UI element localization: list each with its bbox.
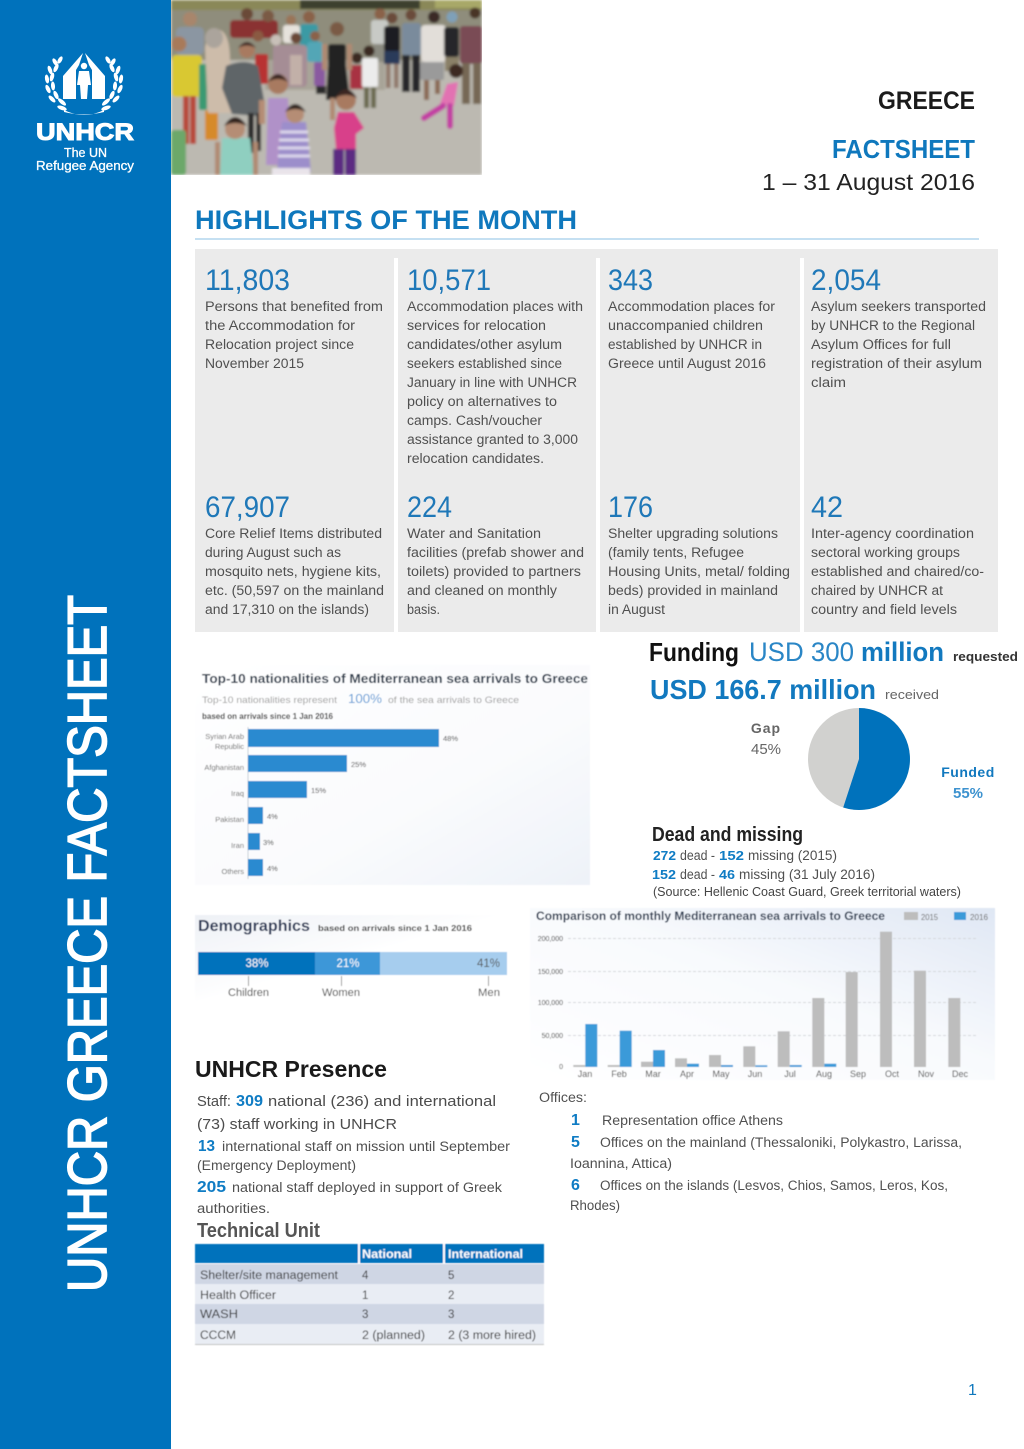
headscarf woman [205, 30, 234, 113]
horizontal bar chart: Republic [215, 742, 244, 751]
horizontal bar chart: 4% [267, 812, 278, 821]
pink shirt child [334, 112, 364, 150]
header: factsheet: FACTSHEET [832, 134, 975, 164]
figure: 176: Housing Units, metal/ folding [608, 564, 790, 579]
figure: 2,054: registration of their asylum [811, 356, 982, 371]
month labels: Dec [952, 1069, 968, 1079]
funding received: received [885, 687, 939, 702]
figure: 10,571: January in line with UNHCR [407, 375, 577, 390]
panel: demographics [195, 915, 510, 1005]
table: technical unit staff: National [362, 1249, 412, 1261]
header: country: GREECE [878, 87, 975, 115]
table: technical unit staff: 4 [362, 1270, 369, 1282]
vertical title: UNHCR GREECE FACTSHEET [56, 595, 118, 1292]
figure: 11,803: 11,803 [205, 264, 290, 297]
offices text: Ioannina, Attica) [570, 1156, 672, 1171]
heading: technical unit: Technical Unit [197, 1220, 320, 1242]
month labels: Apr [680, 1069, 694, 1079]
figure: 224: facilities (prefab shower and [407, 545, 584, 560]
funding heading: requested [953, 649, 1018, 664]
month labels: Oct [885, 1069, 899, 1079]
background children [255, 54, 268, 84]
figure: 67,907: Core Relief Items distributed [205, 526, 382, 541]
horizontal bar chart: 25% [351, 760, 366, 769]
staff text: 309 [236, 1093, 263, 1110]
running girl [440, 82, 458, 106]
table: technical unit staff: 1 [362, 1290, 368, 1302]
offices text: Offices on the mainland (Thessaloniki, Polykastro, Larissa, [600, 1135, 962, 1150]
gridlines and axis labels: 0 [559, 1064, 563, 1071]
staff text: (Emergency Deployment) [197, 1158, 356, 1173]
heading: UNHCR presence: UNHCR Presence [195, 1056, 387, 1082]
figure: 10,571 [407, 264, 583, 466]
horizontal bar chart: Iraq [231, 789, 244, 798]
staff text [197, 1093, 511, 1216]
table: technical unit staff: International [448, 1249, 523, 1261]
table: technical unit staff: 2 (3 more hired) [448, 1330, 536, 1342]
figure: 343: established by UNHCR in [608, 337, 762, 352]
funding pie chart [808, 708, 910, 810]
bar labels: Men [478, 987, 500, 999]
panel: monthly arrivals comparison chart [530, 908, 995, 1080]
figure: 224: Water and Sanitation [407, 526, 541, 541]
panel: key figures [195, 249, 998, 632]
figure: 11,803: November 2015 [205, 356, 304, 371]
figure: 10,571: camps. Cash/voucher [407, 413, 543, 428]
figure: 10,571: seekers established since [407, 356, 562, 371]
staff text: international staff on mission until September [222, 1139, 511, 1154]
figure: 343 [608, 264, 776, 371]
gridlines and axis labels: 50,000 [542, 1033, 563, 1040]
dead and missing: 46 [719, 868, 735, 882]
figure: 2,054: by UNHCR to the Regional [811, 318, 975, 333]
offices text: 5 [571, 1134, 580, 1151]
figure: 11,803: Persons that benefited from [205, 299, 383, 314]
chart title: Comparison of monthly Mediterranean sea arrivals to Greece [536, 911, 885, 923]
chart legend [904, 912, 989, 922]
figure: 343: 343 [608, 264, 653, 297]
figure: 67,907: 67,907 [205, 491, 290, 524]
dead and missing: 152 [719, 849, 744, 863]
figure: 2,054: Asylum seekers transported [811, 299, 986, 314]
table: technical unit staff: 3 [362, 1309, 368, 1321]
table: technical unit staff: 5 [448, 1270, 454, 1282]
icon: wreath [44, 56, 124, 115]
figure: 42: sectoral working groups [811, 545, 960, 560]
figure: 224: basis. [407, 602, 440, 617]
figure: 67,907: mosquito nets, hygiene kits, [205, 564, 381, 579]
offices text: 1 [571, 1112, 580, 1129]
horizontal bar chart [204, 727, 458, 879]
stacked bar: 38% [245, 958, 269, 970]
figure: 176: 176 [608, 491, 653, 524]
offices text [539, 1090, 962, 1213]
funding heading: Funding [649, 637, 739, 667]
dead and missing: Dead and missing [652, 824, 803, 846]
table: technical unit staff: Health Officer [200, 1290, 276, 1302]
offices text: Rhodes) [570, 1198, 620, 1213]
figure: 224 [407, 491, 584, 617]
header: date: 1 – 31 August 2016 [762, 169, 975, 195]
staff text: national staff deployed in support of Greek [232, 1180, 502, 1195]
funding heading: USD 300 [749, 637, 854, 667]
horizontal bar chart: 3% [263, 838, 274, 847]
figure: 2,054: Asylum Offices for full [811, 337, 951, 352]
sidebar [0, 0, 171, 1449]
horizontal bar chart: 15% [311, 786, 326, 795]
pie label: gap [751, 720, 781, 758]
figure: 176: Shelter upgrading solutions [608, 526, 778, 541]
figure: 343: Accommodation places for [608, 299, 776, 314]
pie label: funded: Funded [941, 764, 995, 780]
striped child [277, 122, 311, 172]
figure: 67,907 [205, 491, 384, 617]
figure: 42: country and field levels [811, 602, 957, 617]
left bottom green [171, 130, 186, 175]
dead and missing: missing (31 July 2016) [739, 867, 875, 882]
figure: 11,803: the Accommodation for [205, 318, 356, 333]
figure: 2,054: 2,054 [811, 264, 881, 297]
figure: 42 [811, 491, 984, 617]
stacked bar: 41% [477, 958, 500, 970]
figure: 224: and cleaned on monthly [407, 583, 557, 598]
icon: sheltering hands and family [63, 53, 105, 99]
yellow shirt child [172, 55, 202, 97]
logo tagline line 2: Refugee Agency [36, 159, 135, 173]
horizontal bar chart: Afghanistan [204, 763, 244, 772]
bars: 2015 [573, 932, 960, 1067]
horizontal bar chart: Pakistan [215, 815, 244, 824]
figure: 42: chaired by UNHCR at [811, 583, 943, 598]
black dress woman [328, 44, 346, 68]
offices text: Offices: [539, 1090, 587, 1105]
dead and missing: dead - [680, 848, 715, 863]
figure: 10,571: Accommodation places with [407, 299, 583, 314]
figure: 10,571: relocation candidates. [407, 451, 544, 466]
heading: highlights of the month: HIGHLIGHTS OF THE MONTH [195, 205, 577, 235]
figure: 224: toilets) provided to partners [407, 564, 581, 579]
chart legend: 2016 [970, 913, 989, 922]
figure: 176: in August [608, 602, 665, 617]
table: technical unit staff [195, 1244, 544, 1345]
logo tagline line 1: The UN [64, 146, 107, 160]
staff text: authorities. [197, 1201, 270, 1216]
panel: top-10 nationalities chart [195, 665, 590, 885]
dead and missing: 272 [653, 849, 676, 863]
demographics heading: Demographics [198, 918, 310, 935]
logo wordmark: UNHCR [36, 119, 134, 146]
chart title: Top-10 nationalities of Mediterranean sea arrivals to Greece [202, 672, 588, 686]
month labels: Aug [816, 1069, 832, 1079]
figure: 42: Inter-agency coordination [811, 526, 974, 541]
dead and missing [652, 824, 961, 899]
table: technical unit staff: 2 [448, 1290, 454, 1302]
pie label: gap: Gap [751, 720, 781, 736]
chart subtitle: 100% [348, 691, 382, 706]
demographics note: based on arrivals since 1 Jan 2016 [318, 923, 472, 933]
figure: 176 [608, 491, 790, 617]
gridlines and axis labels: 200,000 [538, 936, 563, 943]
month labels: Mar [645, 1069, 661, 1079]
back adults [371, 20, 388, 44]
stacked bar [198, 952, 507, 975]
figure: 224: 224 [407, 491, 452, 524]
figure: 10,571: candidates/other asylum [407, 337, 562, 352]
table: technical unit staff: 3 [448, 1309, 454, 1321]
funding heading: million [861, 637, 944, 667]
figure: 343: unaccompanied children [608, 318, 763, 333]
pie label: funded [941, 764, 995, 802]
grey dress girl [222, 62, 264, 116]
mint dress child [220, 138, 254, 175]
chart subtitle: of the sea arrivals to Greece [388, 695, 519, 706]
table: technical unit staff: Shelter/site management [200, 1270, 339, 1282]
purple dress girl [266, 98, 290, 165]
horizontal bar chart: Syrian Arab [205, 732, 244, 741]
month labels: Sep [850, 1069, 866, 1079]
offices text: Representation office Athens [602, 1113, 783, 1128]
bar labels: Children [228, 987, 269, 999]
bar labels [228, 976, 500, 999]
staff text: 205 [197, 1179, 226, 1196]
pie label: funded: 55% [953, 785, 983, 802]
table: technical unit staff: WASH [200, 1309, 238, 1321]
month labels: May [712, 1069, 730, 1079]
horizontal bar chart: 4% [267, 864, 278, 873]
chart subtitle: Top-10 nationalities represent [202, 695, 337, 706]
table: technical unit staff: CCCM [200, 1330, 236, 1342]
figure: 67,907: and 17,310 on the islands) [205, 602, 369, 617]
table: technical unit staff: 2 (planned) [362, 1330, 425, 1342]
page number: 1 [968, 1382, 977, 1399]
figure: 343: Greece until August 2016 [608, 356, 766, 371]
chart note: based on arrivals since 1 Jan 2016 [202, 712, 334, 721]
month labels: Jun [748, 1069, 762, 1079]
staff text: national (236) and international [268, 1094, 496, 1110]
dead and missing: (Source: Hellenic Coast Guard, Greek territorial waters) [653, 885, 961, 899]
staff text: Staff: [197, 1094, 231, 1110]
figure: 10,571: policy on alternatives to [407, 394, 557, 409]
figure: 67,907: during August such as [205, 545, 341, 560]
month labels [578, 1069, 968, 1079]
horizontal bar chart: 48% [443, 734, 458, 743]
gridlines and axis labels: 150,000 [538, 969, 563, 976]
figure: 176: beds) provided in mainland [608, 583, 778, 598]
funding received: USD 166.7 million [650, 674, 876, 705]
bars: 2016 [585, 1024, 836, 1067]
figure: 10,571: services for relocation [407, 318, 546, 333]
horizontal bar chart: Iran [231, 841, 244, 850]
offices text: Offices on the islands (Lesvos, Chios, Samos, Leros, Kos, [600, 1178, 948, 1193]
dead and missing: dead - [680, 867, 715, 882]
month labels: Jan [578, 1069, 592, 1079]
figure: 176: (family tents, Refugee [608, 545, 744, 560]
horizontal bar chart: Others [221, 867, 244, 876]
staff text: 13 [198, 1138, 215, 1155]
funding heading [649, 637, 1018, 667]
figure: 11,803: Relocation project since [205, 337, 354, 352]
dead and missing: 152 [652, 868, 676, 882]
figure: 67,907: etc. (50,597 on the mainland [205, 583, 384, 598]
staff text: (73) staff working in UNHCR [197, 1117, 397, 1133]
chart legend: 2015 [921, 913, 939, 922]
month labels: Jul [784, 1069, 796, 1079]
UNHCR logo [36, 53, 135, 173]
month labels: Feb [611, 1069, 627, 1079]
gridlines and axis labels: 100,000 [538, 1000, 563, 1007]
month labels: Nov [918, 1069, 934, 1079]
figure: 2,054 [811, 264, 986, 390]
chart subtitle [202, 691, 519, 706]
figure: 11,803 [205, 264, 383, 371]
figure: 10,571: 10,571 [407, 264, 491, 297]
figure: 2,054: claim [811, 375, 846, 390]
dead and missing: missing (2015) [748, 848, 837, 863]
figure: 42: 42 [811, 491, 843, 524]
gridlines and axis labels [538, 936, 977, 1071]
stacked bar: 21% [336, 958, 360, 970]
figure: 42: established and chaired/co- [811, 564, 984, 579]
bar labels: Women [322, 987, 360, 999]
photo: refugee children playing [171, 0, 482, 175]
pie label: gap: 45% [751, 741, 781, 758]
offices text: 6 [571, 1177, 580, 1194]
figure: 10,571: assistance granted to 3,000 [407, 432, 578, 447]
